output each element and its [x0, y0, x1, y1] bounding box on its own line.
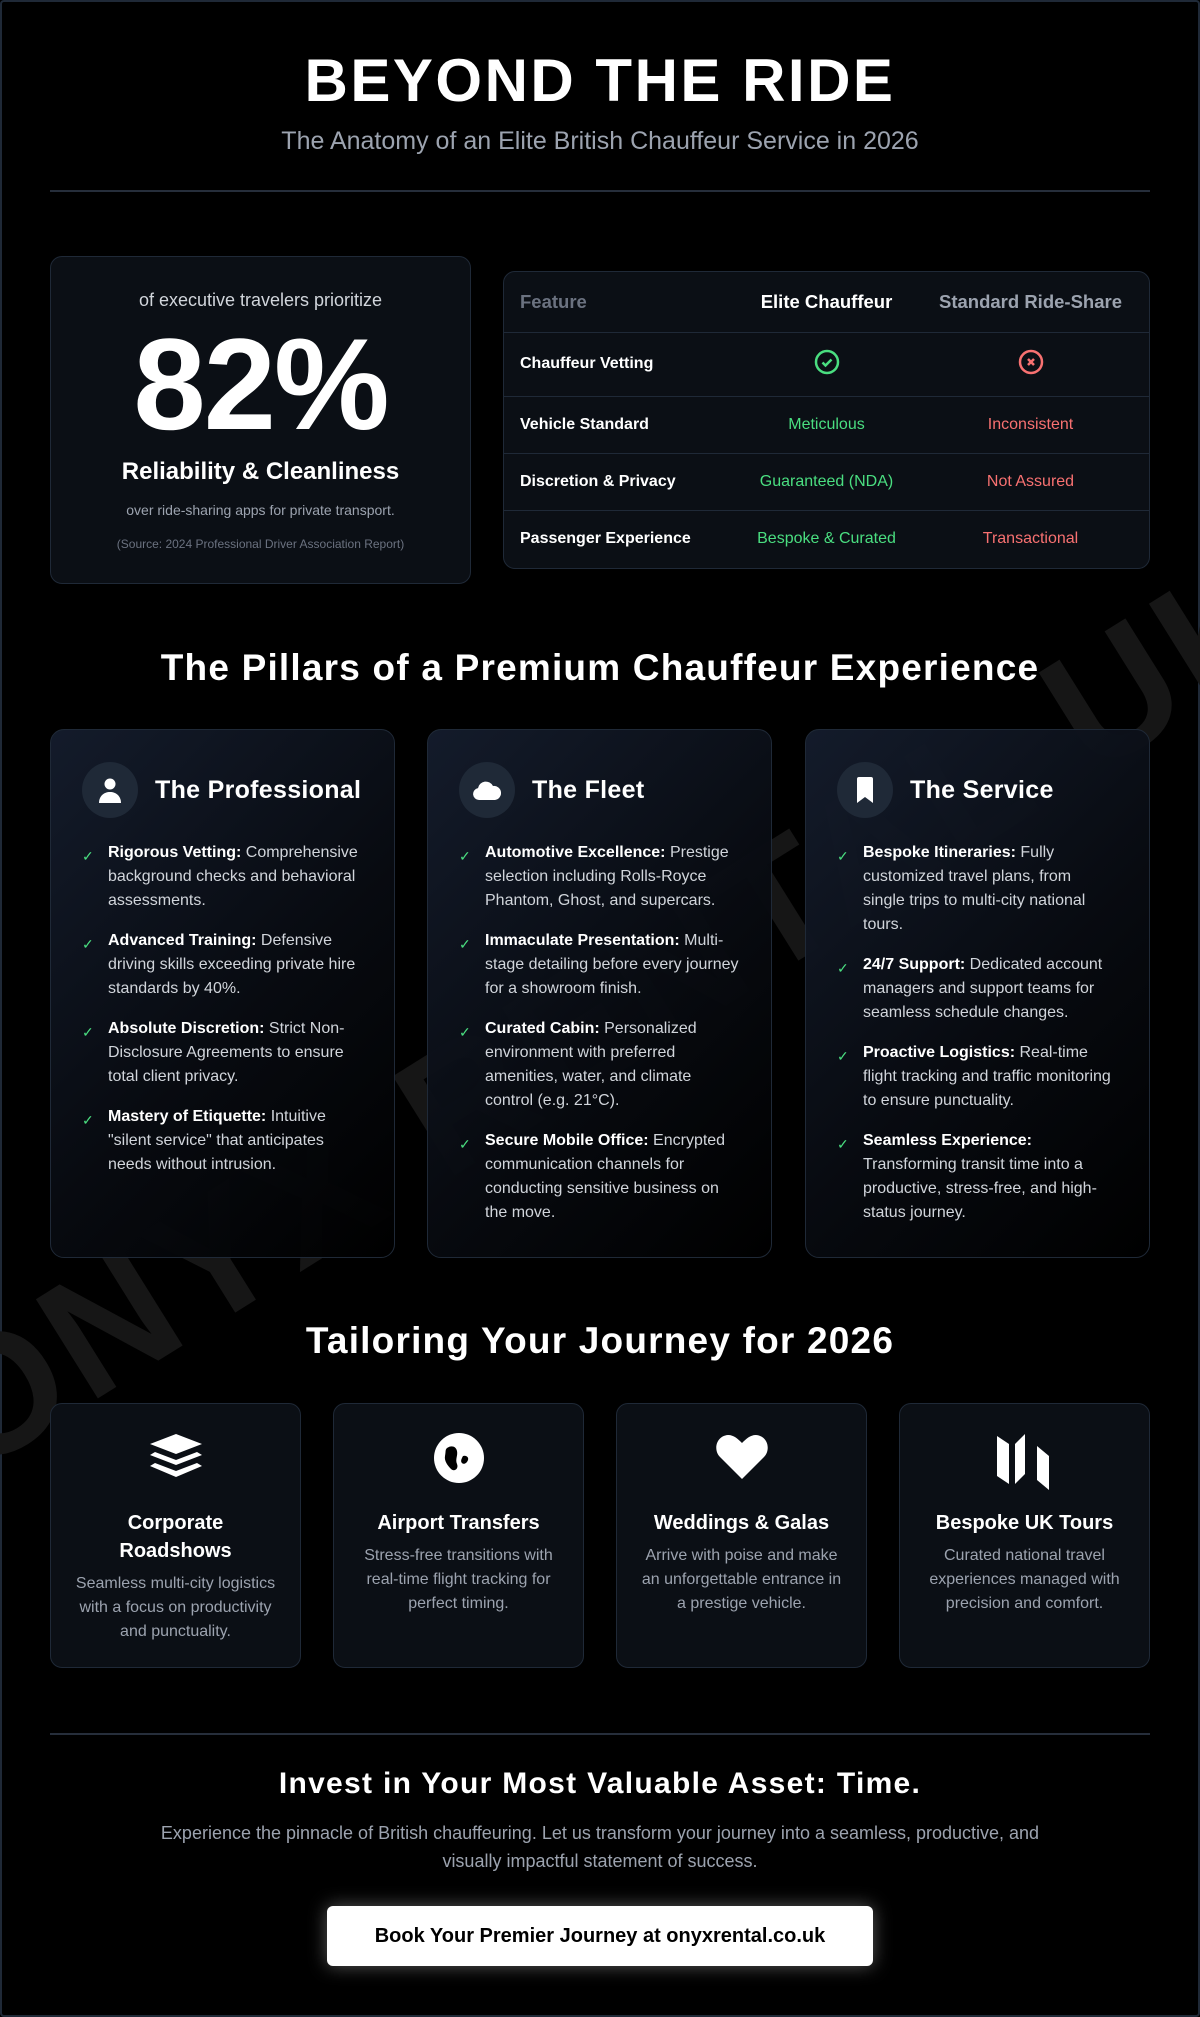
list: service: 24/7 Support: Dedicated account managers and support teams for seamless schedule changes.: [863, 956, 1102, 1021]
cta button: Book Your Premier Journey at onyxrental.co.uk: [375, 1925, 825, 1947]
panel: the fleet: [427, 729, 772, 1258]
card: bespoke uk tours: [899, 1403, 1150, 1668]
icon: heart: [716, 1435, 768, 1479]
cta text: Experience the pinnacle of British chauffeuring. Let us transform your journey into a seamless, productive, and visually impactful statement of success.: [161, 1823, 1039, 1871]
comparison table: Vehicle Standard: [520, 416, 649, 432]
text: weddings & galas: Arrive with poise and make an unforgettable entrance in a prestige vehicle.: [642, 1547, 841, 1612]
title: corporate roadshows: Roadshows: [119, 1540, 232, 1562]
pillars heading: The Pillars of a Premium Chauffeur Experience: [161, 647, 1039, 688]
cta button: [327, 1906, 873, 1966]
heading: the fleet: The Fleet: [532, 776, 644, 804]
comparison table: [503, 271, 1150, 569]
list: professional: Rigorous Vetting: Comprehensive background checks and behavioral assessments.: [108, 844, 358, 909]
heading: the service: [837, 762, 1054, 818]
heading: the fleet: [459, 762, 644, 818]
heading: the professional: [82, 762, 361, 818]
comparison table: Chauffeur Vetting: [520, 355, 653, 372]
comparison table: Passenger Experience: [520, 530, 691, 547]
comparison table: Standard Ride-Share: [939, 291, 1122, 312]
stat source: (Source: 2024 Professional Driver Association Report): [117, 537, 404, 551]
comparison table: Transactional: [983, 530, 1078, 547]
list: fleet: Immaculate Presentation: Multi-stage detailing before every journey for a showroom finish.: [485, 932, 738, 997]
comparison table: Guaranteed (NDA): [760, 472, 893, 490]
card: airport transfers: [333, 1403, 584, 1668]
stat number: 82%: [133, 311, 388, 457]
list: fleet: Secure Mobile Office: Encrypted communication channels for conducting sensitive business on the move.: [485, 1132, 725, 1221]
subtitle: The Anatomy of an Elite British Chauffeur Service in 2026: [281, 127, 919, 155]
stat label: Reliability & Cleanliness: [122, 458, 399, 485]
text: bespoke uk tours: Curated national travel experiences managed with precision and comfort.: [929, 1547, 1120, 1612]
icon: map: [997, 1434, 1049, 1490]
list: fleet: [461, 844, 738, 1221]
comparison table: Discretion & Privacy: [520, 472, 676, 490]
comparison table: Inconsistent: [988, 416, 1073, 432]
comparison table: Meticulous: [788, 416, 865, 432]
heading: the service: The Service: [910, 776, 1054, 804]
title: bespoke uk tours: Bespoke UK Tours: [936, 1512, 1113, 1534]
title: airport transfers: Airport Transfers: [377, 1512, 540, 1534]
stat card: 82%: [50, 256, 471, 584]
panel: the professional: [50, 729, 395, 1258]
icon: layers: [150, 1434, 202, 1477]
comparison table: Not Assured: [987, 472, 1074, 490]
list: service: [839, 844, 1111, 1221]
panel: the service: [805, 729, 1150, 1258]
card: corporate roadshows: [50, 1403, 301, 1668]
list: professional: Absolute Discretion: Strict Non-Disclosure Agreements to ensure total client privacy.: [108, 1020, 344, 1085]
text: airport transfers: Stress-free transitions with real-time flight tracking for perfect timing.: [364, 1547, 553, 1612]
text: corporate roadshows: Seamless multi-city logistics with a focus on productivity and punctuality.: [76, 1575, 275, 1640]
tailoring heading: Tailoring Your Journey for 2026: [306, 1320, 894, 1361]
list: professional: Advanced Training: Defensive driving skills exceeding private hire standards by 40%.: [108, 932, 355, 997]
list: professional: Mastery of Etiquette: Intuitive "silent service" that anticipates needs without intrusion.: [108, 1108, 326, 1173]
list: service: Proactive Logistics: Real-time flight tracking and traffic monitoring to ensure punctuality.: [863, 1044, 1111, 1109]
stat lead-in: of executive travelers prioritize: [139, 290, 382, 310]
comparison table: Elite Chauffeur: [761, 291, 892, 312]
title: corporate roadshows: [119, 1512, 232, 1562]
list: service: Bespoke Itineraries: Fully customized travel plans, from single trips to multi-city national tours.: [863, 844, 1085, 933]
comparison table: Feature: [520, 291, 587, 312]
list: fleet: Curated Cabin: Personalized environment with preferred amenities, water, and climate control (e.g. 21°C).: [485, 1020, 697, 1109]
title: corporate roadshows: Corporate: [128, 1512, 223, 1534]
comparison table: Bespoke & Curated: [757, 530, 896, 547]
card: weddings & galas: [616, 1403, 867, 1668]
icon: globe: [434, 1433, 484, 1483]
list: professional: [84, 844, 358, 1173]
list: service: Seamless Experience: Transforming transit time into a productive, stress-free, and high-status journey.: [863, 1132, 1097, 1221]
title: weddings & galas: Weddings & Galas: [654, 1512, 829, 1534]
cta heading: Invest in Your Most Valuable Asset: Time.: [279, 1767, 921, 1800]
stat description: over ride-sharing apps for private transport.: [126, 502, 395, 518]
list: fleet: Automotive Excellence: Prestige selection including Rolls-Royce Phantom, Ghost, and supercars.: [485, 844, 729, 909]
title: BEYOND THE RIDE: [305, 47, 895, 114]
heading: the professional: The Professional: [155, 776, 361, 804]
